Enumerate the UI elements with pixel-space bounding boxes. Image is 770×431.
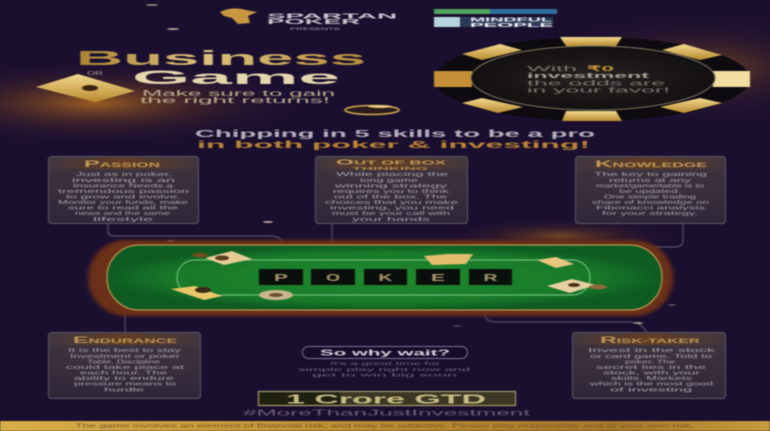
POKER tiles: E	[431, 273, 446, 284]
panel text: returns at any	[609, 178, 692, 184]
table rim	[88, 240, 673, 316]
chip gold segments	[434, 37, 750, 121]
heading: in both poker & investing!	[197, 140, 590, 151]
panel: Passion	[48, 156, 198, 224]
partner wordmark: MINDFUL	[470, 18, 552, 24]
subtitle: Make sure to gain	[142, 89, 335, 98]
panel text: of investing	[610, 388, 692, 394]
footer strip	[0, 421, 770, 431]
panel text: winning strategy	[335, 184, 448, 190]
panel text: tremendous passion	[58, 189, 189, 195]
title: Business or Game: Game	[132, 68, 340, 89]
subtitle	[140, 89, 335, 105]
panel text: Just as in poker,	[76, 172, 172, 178]
callout text: simple play right now and	[298, 367, 471, 373]
chip text: the odds are	[527, 78, 665, 88]
panel title	[50, 334, 199, 345]
connector lines	[108, 223, 683, 332]
panel title: E NDURANCE	[73, 335, 177, 345]
panel text: One simple trading	[604, 194, 696, 200]
callout text: It's a great time for	[330, 361, 441, 367]
chip text: ₹0	[587, 64, 614, 73]
panel text: stock, with your	[603, 370, 701, 376]
title: Business or Game: OR	[87, 71, 104, 77]
icon: spartan helmet	[220, 8, 257, 24]
partner wordmark: PEOPLE	[470, 23, 554, 29]
panel text: could take place at	[66, 365, 185, 371]
panel text: hurdle	[104, 388, 144, 394]
background glow: left of title	[0, 61, 305, 145]
POKER tiles	[259, 269, 512, 285]
button: 1 Crore GTD	[258, 392, 516, 406]
panel text: ability to endure	[74, 376, 174, 382]
panel text: investing, you need	[330, 206, 454, 212]
panel text: While placing the	[336, 172, 448, 178]
panel text: requires you to think	[333, 189, 450, 195]
panel text: pressure means to	[74, 382, 176, 388]
partner wordmark	[434, 17, 554, 29]
panel title	[50, 158, 197, 169]
background glow: right of chip	[530, 13, 770, 123]
panel title: R ISK-TAKER	[600, 335, 702, 345]
panel: Out of box thinking	[316, 156, 468, 224]
big poker chip	[434, 37, 750, 121]
panel text	[66, 348, 185, 394]
panel text: skills. Markets	[611, 376, 693, 382]
panel text: It is the best to stay	[68, 348, 182, 354]
panel text: long game	[360, 178, 418, 184]
wordmark	[267, 14, 397, 31]
panel: Endurance	[48, 332, 200, 398]
logo: moneycontrol Mindful People	[434, 9, 557, 29]
callout: So why wait: So why wait?	[320, 348, 450, 358]
panel text: each hour. The	[80, 370, 167, 376]
panel text	[592, 172, 709, 217]
table gold edge and felt	[107, 245, 662, 310]
hashtag: #MoreThanJustInvestment	[243, 408, 532, 418]
panel text: sure to read all the	[68, 206, 178, 212]
panel text	[588, 348, 716, 394]
panel title	[317, 158, 466, 171]
panel text: Insurance Needs a	[73, 184, 173, 190]
panel text: must be your call with	[332, 211, 450, 217]
panel title: O UT OF BOX	[336, 158, 447, 166]
chip text: investment	[527, 71, 651, 80]
panel text	[58, 172, 189, 223]
cards and chips on table	[171, 251, 607, 300]
panel text: The key to gaining	[594, 172, 707, 178]
heading	[195, 129, 595, 151]
panel text: poker. The	[625, 360, 675, 366]
panel text: lifestyle	[93, 217, 153, 223]
panel title: P ASSION	[84, 159, 160, 169]
button: 1 Crore GTD: 1 Crore GTD	[286, 392, 486, 406]
panel text: choices that you make	[325, 200, 458, 206]
POKER tiles: O	[326, 273, 340, 284]
panel text: share of knowledge on	[592, 200, 709, 206]
panel text: market/game/table is to	[596, 184, 704, 190]
title: Business or Game: Business	[76, 48, 366, 70]
panel text: to grow and evolve.	[66, 194, 181, 200]
panel text: be updated.	[619, 189, 681, 195]
panel: Knowledge	[576, 156, 726, 224]
panel text: which is the most good	[590, 382, 713, 388]
panel text: investing is an	[72, 178, 175, 184]
chip text: With	[527, 64, 577, 73]
wordmark: SPARTAN	[267, 14, 397, 20]
panel text: or card game. Told to	[590, 354, 712, 360]
heading: Chipping in 5 skills to be a pro	[195, 129, 595, 140]
panel text: Table. Discipline	[87, 360, 160, 366]
callout text	[298, 361, 471, 378]
chip text	[527, 64, 670, 94]
logo: Spartan Poker	[220, 8, 397, 31]
moneycontrol bar	[434, 9, 557, 14]
poker table	[88, 240, 673, 316]
panel text: your hands	[352, 217, 431, 223]
background glow: centre above table	[440, 218, 680, 254]
panel text: Fibonacci analysis	[596, 206, 706, 212]
POKER tiles: R	[484, 273, 499, 284]
footer strip: The game involves an element of financial risk, and may be addictive. Please play responsibly and at your own risk.	[75, 424, 695, 430]
title: Business or Game	[76, 48, 366, 89]
inner betting line	[177, 260, 590, 295]
panel text: out of the box. The	[334, 194, 447, 200]
panel title	[574, 334, 724, 345]
panel text: Invest in the stock	[588, 348, 716, 354]
wordmark: PRESENTS	[290, 27, 342, 31]
panel text: secret lies in the	[596, 365, 706, 371]
chip inner face	[471, 46, 715, 110]
panel title: K NOWLEDGE	[595, 159, 707, 169]
panel title	[577, 158, 724, 169]
chip text: in your favor!	[527, 86, 670, 94]
icon: gold playing card	[36, 74, 135, 102]
panel text: Monitor your funds, make	[58, 200, 188, 206]
panel text: for your strategy.	[602, 211, 698, 217]
panel text: Investment or poker	[70, 354, 181, 360]
panel title: THINKING	[352, 166, 430, 171]
panel: Risk-taker	[572, 332, 726, 398]
chip body	[434, 37, 750, 121]
panel text: news and the same	[75, 211, 170, 217]
icon: small chip	[345, 105, 399, 114]
panel text	[325, 172, 458, 223]
callout: So why wait	[302, 346, 468, 358]
callout text: get to win big soon	[312, 372, 458, 378]
POKER tiles: P	[274, 273, 289, 284]
wordmark: POKER	[267, 19, 360, 26]
sparkles	[146, 4, 676, 327]
subtitle: the right returns!	[140, 96, 330, 105]
POKER tiles: K	[378, 273, 394, 284]
